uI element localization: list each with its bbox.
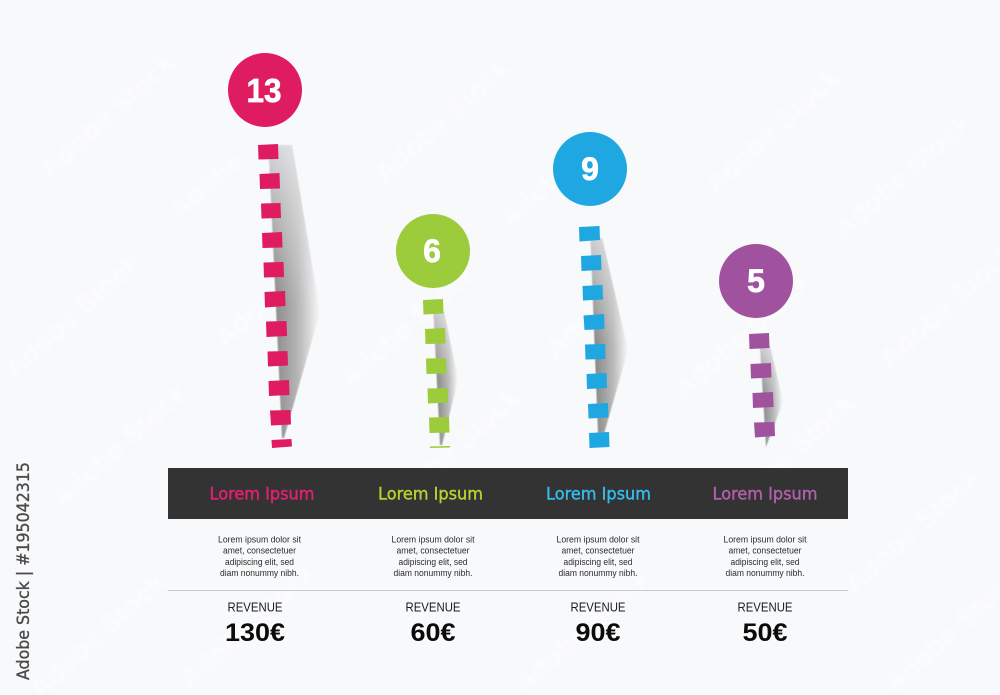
watermark pattern: Adobe Stock <box>713 387 862 524</box>
value: 5: 5 <box>747 263 765 299</box>
watermark pattern: Adobe Stock <box>668 267 817 404</box>
watermark pattern: Adobe <box>163 145 249 226</box>
amount: 130€: 130€ <box>225 619 285 647</box>
text block: column 4: Lorem ipsum dolor sit <box>724 534 807 544</box>
value circle: 6 <box>396 214 470 288</box>
text block: column 3: amet, consectetuer <box>562 546 635 556</box>
amount: 60€: 60€ <box>410 619 456 647</box>
heading: purple: Lorem Ipsum <box>712 484 818 504</box>
bar 3: blue, value 9 <box>553 132 628 448</box>
revenue: column 4: REVENUE <box>738 600 793 614</box>
watermark pattern: Adobe <box>208 273 294 354</box>
text block: column 4 <box>724 534 807 578</box>
text block: column 1 <box>218 534 302 578</box>
heading: blue: Lorem Ipsum <box>546 484 651 504</box>
text block: column 2: adipiscing elit, sed <box>398 557 468 567</box>
watermark pattern: Adobe <box>538 283 624 364</box>
text block: column 4: amet, consectetuer <box>728 546 802 556</box>
bar 1: pink, value 13 <box>228 53 320 448</box>
stock id side label: Adobe Stock | #195042315 <box>14 462 33 680</box>
watermark pattern: Adobe Stock <box>0 247 147 384</box>
heading: pink: Lorem Ipsum <box>210 484 314 504</box>
revenue: column 1: REVENUE <box>228 600 283 614</box>
blue tick squares <box>579 226 610 448</box>
text block: column 4: diam nonummy nibh. <box>726 568 804 578</box>
shadow: green bar <box>434 312 458 445</box>
watermark pattern: Adobe Stock <box>838 462 987 599</box>
text block: column 1: Lorem ipsum dolor sit <box>218 534 302 544</box>
amount: 50€: 50€ <box>742 619 788 647</box>
heading: green: Lorem Ipsum <box>378 484 483 504</box>
text block: column 1: adipiscing elit, sed <box>225 557 294 567</box>
watermark pattern: Adobe Stock <box>378 382 527 519</box>
value: 9: 9 <box>581 151 599 187</box>
revenue: column 3 <box>570 600 626 647</box>
pink tick squares <box>258 144 292 448</box>
text block: column 3 <box>556 534 640 578</box>
watermark pattern: Adobe Stock <box>33 47 182 184</box>
revenue: column 2 <box>406 600 461 647</box>
value circle: 13 <box>228 53 302 127</box>
green tick squares <box>423 299 450 448</box>
value circle: 9 <box>553 132 627 206</box>
text block: column 3: diam nonummy nibh. <box>558 568 638 578</box>
text block: column 1: amet, consectetuer <box>223 546 296 556</box>
watermark pattern: Adobe Stock <box>828 107 977 244</box>
bar 2: green, value 6 <box>396 214 470 448</box>
shadow: blue bar <box>590 238 628 434</box>
text block: column 2 <box>392 534 475 578</box>
revenue: column 2: REVENUE <box>406 600 461 614</box>
watermark pattern: Adobe Stock <box>173 557 322 694</box>
shadow: purple bar <box>760 346 783 447</box>
text block: column 3: Lorem ipsum dolor sit <box>556 534 640 544</box>
bar 4: purple, value 5 <box>719 244 793 447</box>
value: 13: 13 <box>246 72 282 109</box>
value: 6: 6 <box>423 233 441 269</box>
shadow: pink bar <box>268 145 320 438</box>
revenue: column 3: REVENUE <box>570 600 626 614</box>
watermark pattern: Adobe Stock <box>368 52 517 189</box>
watermark pattern: Adobe <box>493 153 579 234</box>
text block: column 3: adipiscing elit, sed <box>564 557 633 567</box>
purple tick squares <box>749 333 775 438</box>
watermark pattern: Adobe Stock <box>45 377 194 514</box>
revenue: column 4 <box>738 600 793 647</box>
header band <box>168 468 848 519</box>
value circle: 5 <box>719 244 793 318</box>
amount: 90€: 90€ <box>576 619 621 647</box>
text block: column 2: diam nonummy nibh. <box>394 568 472 578</box>
text block: column 2: Lorem ipsum dolor sit <box>392 534 475 544</box>
watermark pattern: Adobe Stock <box>333 257 482 394</box>
text block: column 1: diam nonummy nibh. <box>220 568 299 578</box>
revenue: column 1 <box>225 600 285 647</box>
watermark pattern: Adobe Stock <box>698 62 847 199</box>
text block: column 2: amet, consectetuer <box>396 546 470 556</box>
text block: column 4: adipiscing elit, sed <box>730 557 800 567</box>
